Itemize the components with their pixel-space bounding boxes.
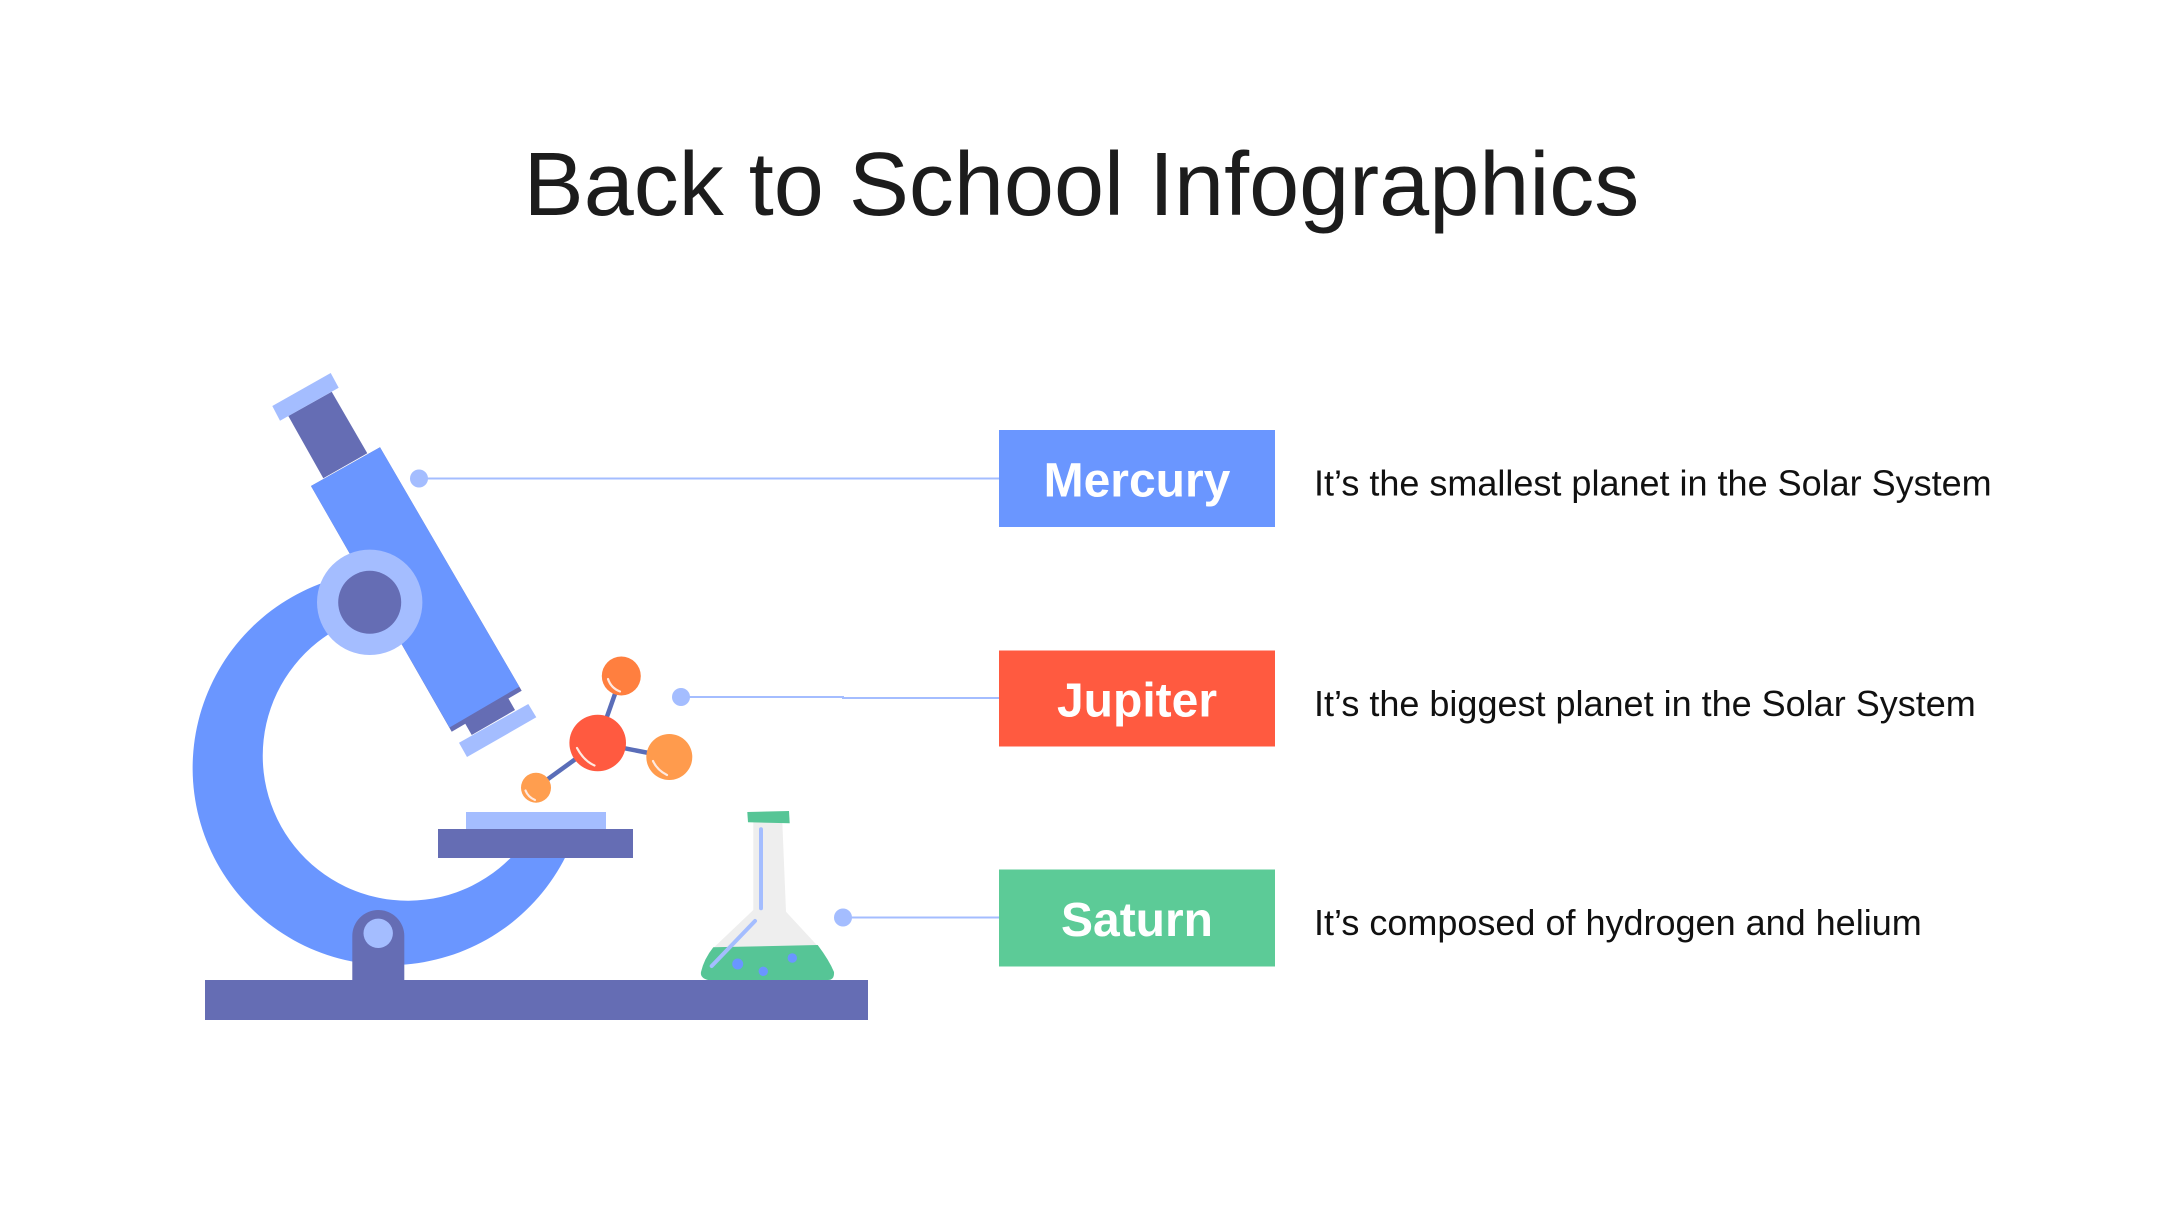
flask highlights <box>712 829 761 966</box>
label: Jupiter <box>999 650 1275 746</box>
microscope arm <box>193 582 571 965</box>
description: Mercury: It’s the smallest planet in the Solar System <box>1314 462 1992 504</box>
label: Saturn <box>999 870 1275 966</box>
slide <box>466 812 606 830</box>
flask <box>701 811 834 980</box>
connector: Jupiter <box>672 688 999 706</box>
flask liquid <box>701 945 834 980</box>
microscope body <box>311 447 519 728</box>
bubbles <box>732 953 797 976</box>
base <box>205 980 868 1020</box>
objective lens tube <box>465 698 515 735</box>
microscope illustration <box>193 373 868 1020</box>
label: Saturn: Saturn <box>1061 894 1213 947</box>
label: Jupiter: Jupiter <box>1057 674 1217 728</box>
focus knob <box>317 550 422 655</box>
label: Mercury: Mercury <box>1044 454 1231 508</box>
description: Jupiter: It’s the biggest planet in the Solar System <box>1314 683 1976 724</box>
atom: top <box>602 656 641 696</box>
arm joint <box>352 910 404 982</box>
highlights <box>526 679 667 800</box>
objective lens cap <box>459 704 536 757</box>
connector: Saturn <box>834 908 999 926</box>
atom: centre <box>569 715 626 771</box>
microscope body shadow <box>311 447 522 732</box>
atom: right <box>646 734 692 780</box>
atom: left <box>521 773 551 803</box>
bonds <box>536 676 669 788</box>
stage <box>438 829 633 858</box>
title: Back to School Infographics <box>524 135 1639 235</box>
flask cap <box>747 811 790 823</box>
label: Mercury <box>999 430 1275 527</box>
eyepiece cap <box>272 373 339 421</box>
connector: Mercury <box>410 470 999 488</box>
molecule <box>521 656 692 803</box>
flask glass <box>713 822 818 948</box>
eyepiece tube <box>288 392 367 478</box>
description: Saturn: It’s composed of hydrogen and helium <box>1314 902 1922 943</box>
